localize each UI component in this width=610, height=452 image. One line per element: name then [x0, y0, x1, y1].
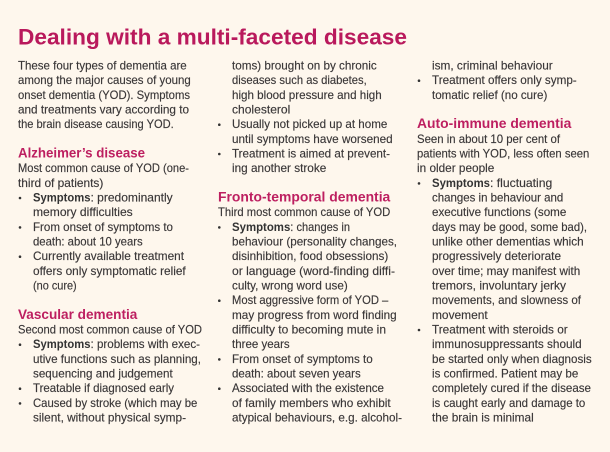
heading: Vascular dementia: Vascular dementia [18, 306, 138, 322]
bullet: Vascular symptoms: utive functions such as planning, [33, 352, 201, 366]
bullet: Fronto-temporal time to death: From onset of symptoms to [232, 352, 373, 366]
bullet: Alzheimer's symptoms: Symptoms [33, 190, 91, 204]
text: Alzheimer's summary: third of patients) [18, 176, 103, 190]
bullet: Auto-immune treatment: is caught early and damage to [432, 396, 586, 410]
bullet: Fronto-temporal family association: atypical behaviours, e.g. alcohol- [232, 410, 402, 424]
bullet: Auto-immune symptoms: days may be good, some bad), [432, 220, 587, 234]
bullet: Fronto-temporal symptoms: Symptoms [232, 220, 291, 234]
heading: Fronto-temporal dementia: Fronto-temporal dementia [218, 188, 390, 204]
bullet: Vascular treatable: Treatable if diagnosed early [33, 381, 174, 395]
bullet: Auto-immune symptoms: executive functions (some [432, 205, 567, 219]
text: Vascular cause continued: toms) brought on by chronic [232, 58, 377, 72]
panel: column 2 [218, 58, 402, 424]
bullet: Fronto-temporal family association: Associated with the existence [232, 381, 384, 395]
bullet: Fronto-temporal aggression: three years [232, 337, 290, 351]
bullet: Alzheimer's symptoms: memory difficulties [33, 205, 133, 219]
text: Auto-immune summary: Seen in about 10 per cent of [417, 132, 561, 146]
bullet: Auto-immune treatment: be started only when diagnosis [432, 352, 592, 366]
bullet: Fronto-temporal treatment: Treatment offers only symp- [432, 73, 577, 87]
bullet: Vascular cause: silent, without physical symp- [33, 410, 186, 424]
text: Vascular summary: Second most common cause of YOD [18, 322, 202, 336]
bullet: Vascular symptoms: : problems with exec- [90, 337, 200, 351]
bullet: Vascular treatment: Treatment is aimed at prevent- [232, 146, 390, 160]
bullet: Vascular symptoms [19, 337, 201, 380]
intro text: These four types of dementia are [18, 58, 187, 72]
bullet: Vascular treatment: ing another stroke [232, 161, 327, 175]
bullet: Vascular detection: Usually not picked up at home [232, 117, 388, 131]
text: Fronto-temporal association continued: ism, criminal behaviour [432, 58, 553, 72]
text: Alzheimer's summary [18, 161, 189, 190]
heading: Alzheimer's disease: Alzheimer’s disease [18, 144, 145, 160]
intro text: among the major causes of young [18, 73, 191, 87]
bullet: Vascular detection: until symptoms have worsened [232, 132, 393, 146]
bullet: Alzheimer's symptoms [19, 190, 173, 219]
bullet: Fronto-temporal time to death [218, 352, 373, 380]
bullet: Vascular symptoms: sequencing and judgement [33, 366, 173, 380]
text: Fronto-temporal summary: Third most common cause of YOD [218, 205, 391, 219]
bullet: Auto-immune symptoms: movement [432, 308, 488, 322]
bullet: Fronto-temporal symptoms [218, 220, 397, 292]
bullet: Fronto-temporal treatment [418, 73, 577, 102]
bullet: Auto-immune symptoms: Symptoms [432, 176, 490, 190]
bullet: Alzheimer's treatment: Currently available treatment [33, 249, 185, 263]
bullet: Vascular cause: Caused by stroke (which may be [33, 396, 198, 410]
bullet: Fronto-temporal aggression: Most aggressive form of YOD – [232, 293, 389, 307]
title: Dealing with a multi-faceted disease [18, 25, 407, 50]
bullet: Auto-immune treatment: the brain is minimal [432, 410, 534, 424]
intro text: onset dementia (YOD). Symptoms [18, 88, 190, 102]
bullet: Auto-immune treatment [418, 322, 592, 424]
text: Auto-immune summary: patients with YOD, less often seen [417, 146, 589, 160]
bullet: Vascular symptoms: Symptoms [33, 337, 91, 351]
bullet: Auto-immune treatment: completely cured if the disease [432, 381, 591, 395]
bullet: Fronto-temporal family association: of family members who exhibit [232, 396, 391, 410]
text: Vascular cause continued: high blood pressure and high [232, 88, 382, 102]
bullet: Alzheimer's time to death: From onset of symptoms to [33, 220, 173, 234]
bullet: Fronto-temporal symptoms: or language (word-finding diffi- [232, 264, 395, 278]
intro text [18, 58, 191, 131]
bullet: Auto-immune symptoms: : fluctuating [490, 176, 552, 190]
bullet: Auto-immune symptoms: over time; may manifest with [432, 264, 580, 278]
bullet: Auto-immune symptoms: movements, and slowness of [432, 293, 582, 307]
bullet: Fronto-temporal aggression: may progress from word finding [232, 308, 397, 322]
bullet: Fronto-temporal aggression: difficulty to becoming mute in [232, 322, 386, 336]
bullet: Vascular detection [218, 117, 393, 146]
bullet: Auto-immune treatment: is confirmed. Patient may be [432, 366, 579, 380]
bullet: Auto-immune symptoms: progressively deteriorate [432, 249, 561, 263]
text: Vascular cause continued: cholesterol [232, 102, 290, 116]
bullet: Auto-immune treatment: Treatment with steroids or [432, 322, 568, 336]
panel: column 1 [18, 58, 202, 424]
bullet: Fronto-temporal aggression [218, 293, 397, 351]
panel: column 3 [417, 58, 592, 424]
heading: Auto-immune dementia: Auto-immune dementia [417, 115, 571, 131]
bullet: Fronto-temporal treatment: tomatic relief (no cure) [432, 88, 547, 102]
bullet: Vascular cause [19, 396, 198, 424]
bullet: Fronto-temporal time to death: death: about seven years [232, 366, 361, 380]
bullet: Alzheimer's symptoms: : predominantly [90, 190, 173, 204]
bullet: Vascular treatment [218, 146, 390, 175]
bullet: Alzheimer's treatment: offers only symptomatic relief [33, 264, 186, 278]
bullet: Alzheimer's treatment: (no cure) [33, 278, 77, 292]
bullet: Auto-immune symptoms [418, 176, 587, 322]
bullet: Fronto-temporal family association [218, 381, 402, 424]
text: Vascular cause continued [232, 58, 382, 116]
intro text: and treatments vary according to [18, 102, 189, 116]
bullet: Auto-immune symptoms: tremors, involuntary jerky [432, 278, 566, 292]
text: Alzheimer's summary: Most common cause of YOD (one- [18, 161, 189, 175]
bullet: Alzheimer's treatment [19, 249, 186, 292]
bullet: Fronto-temporal symptoms: behaviour (personality changes, [232, 234, 397, 248]
text: Auto-immune summary [417, 132, 589, 175]
bullet: Alzheimer's time to death [19, 220, 173, 248]
text: Vascular cause continued: diseases such as diabetes, [232, 73, 367, 87]
bullet: Auto-immune symptoms: unlike other dementias which [432, 234, 584, 248]
bullet: Auto-immune symptoms: changes in behaviour and [432, 190, 563, 204]
bullet: Auto-immune treatment: immunosuppressants should [432, 337, 582, 351]
bullet: Fronto-temporal symptoms: : changes in [290, 220, 350, 234]
bullet: Fronto-temporal symptoms: culty, wrong word use) [232, 278, 348, 292]
intro text: the brain disease causing YOD. [18, 117, 174, 131]
bullet: Alzheimer's time to death: death: about 10 years [33, 234, 143, 248]
text: Auto-immune summary: in older people [417, 161, 495, 175]
bullet: Fronto-temporal symptoms: disinhibition, food obsessions) [232, 249, 388, 263]
